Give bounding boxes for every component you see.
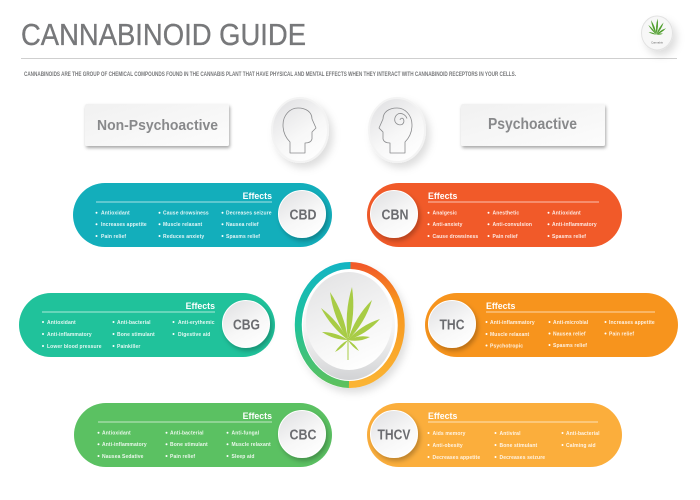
panel: non-psychoactive banner <box>85 104 229 146</box>
icon: cannabis leaf <box>321 287 380 360</box>
panel: CBC: Anti-inflammatory <box>102 442 147 448</box>
panel: CBD: Decreases seizure <box>226 210 272 216</box>
panel: CBG: Effects <box>186 301 215 311</box>
panel: CBG: Anti-erythemic <box>178 320 215 326</box>
panel: THCV: Antiviral <box>500 431 521 437</box>
panel: CBD: Increases appetite <box>101 222 147 228</box>
title: CANNABINOID GUIDE <box>21 17 306 52</box>
panel: CBN <box>367 183 622 247</box>
panel: THCV: Aids memory <box>432 431 466 437</box>
panel: CBG: Digestive aid <box>178 332 210 338</box>
panel: THC: Psychotropic <box>490 343 523 349</box>
panel: THC: Nausea relief <box>553 331 586 337</box>
intro text: CANNABINOIDS ARE THE GROUP OF CHEMICAL COMPOUNDS FOUND IN THE CANNABIS PLANT THAT HAVE PHYSICAL AND MENTAL EFFECTS WHEN THEY INTERACT WITH CANNABINOID RECEPTORS IN YOUR CELLS. <box>24 72 516 78</box>
panel: THCV: Calming aid <box>566 443 596 449</box>
icon: plain head <box>272 98 328 162</box>
panel: CBG: Anti-bacterial <box>117 320 151 326</box>
panel: CBC: Antioxidant <box>102 430 131 436</box>
panel: THC: Pain relief <box>609 331 634 337</box>
panel: psychoactive banner: Psychoactive <box>488 116 577 133</box>
icon: cannabis logo badge: Cannabis <box>651 40 664 44</box>
icon: cannabis logo badge <box>642 16 672 50</box>
panel: THCV: Anti-obesity <box>432 443 463 449</box>
icon: head with spiral <box>369 98 425 162</box>
panel: THC: Effects <box>486 301 515 311</box>
panel: THC: Spasms relief <box>553 343 587 349</box>
panel: CBC: CBC <box>290 428 317 444</box>
panel: CBD: Pain relief <box>101 234 126 240</box>
panel: CBC: Nausea Sedative <box>102 454 144 460</box>
panel: THCV: Effects <box>428 411 457 421</box>
panel: CBG <box>19 293 275 357</box>
panel: THC: Anti-inflammatory <box>490 320 535 326</box>
panel: CBD: Muscle relaxant <box>163 222 203 228</box>
central ring with cannabis leaf <box>294 262 404 388</box>
panel: THC: Increases appetite <box>609 320 655 326</box>
panel: CBD: Cause drowsiness <box>163 210 209 216</box>
panel: CBN: Effects <box>428 191 457 201</box>
panel: CBC <box>74 403 332 467</box>
panel: CBN: Pain relief <box>492 234 518 240</box>
panel: CBN: Analgesic <box>432 210 457 216</box>
panel: CBN: CBN <box>382 208 408 224</box>
panel: CBN: Anti-convulsion <box>492 222 532 228</box>
panel: THCV: Decreases appetite <box>432 455 480 461</box>
panel: non-psychoactive banner: Non-Psychoactive <box>97 117 218 134</box>
panel: CBD: Effects <box>243 191 272 201</box>
panel: CBC: Effects <box>243 411 272 421</box>
panel: CBD: CBD <box>290 208 316 224</box>
panel: THCV: THCV <box>378 428 411 444</box>
panel: CBC: Sleep aid <box>232 454 255 460</box>
panel: CBG: Bone stimulant <box>117 332 155 338</box>
panel: CBG: CBG <box>233 318 260 334</box>
panel: THC: Muscle relaxant <box>490 332 530 338</box>
panel: THCV: Bone stimulant <box>500 443 538 449</box>
panel: CBG: Antioxidant <box>47 320 76 326</box>
panel: THCV <box>367 403 622 467</box>
panel: CBN: Anti-anxiety <box>432 222 463 228</box>
panel: CBD: Nausea relief <box>226 222 259 228</box>
panel: CBN: Cause drowsiness <box>432 234 478 240</box>
panel: CBC: Bone stimulant <box>170 442 208 448</box>
panel: CBC: Pain relief <box>170 454 195 460</box>
panel: CBD: Reduces anxiety <box>163 234 204 240</box>
panel: CBG: Lower blood pressure <box>47 344 102 350</box>
panel: THC <box>425 293 678 357</box>
panel: CBC: Muscle relaxant <box>232 442 271 448</box>
panel: THCV: Decreases seizure <box>500 455 545 461</box>
panel: THCV: Anti-bacterial <box>566 431 600 437</box>
panel: CBC: Anti-fungal <box>232 430 260 436</box>
panel: CBN: Anesthetic <box>492 210 519 216</box>
panel: THC: THC <box>440 318 465 334</box>
panel: CBN: Anti-inflammatory <box>552 222 597 228</box>
panel: CBN: Spasms relief <box>552 234 586 240</box>
panel: CBG: Painkiller <box>117 344 140 350</box>
header divider <box>21 58 677 60</box>
panel: psychoactive banner <box>461 104 605 146</box>
panel: CBC: Anti-bacterial <box>170 430 204 436</box>
panel: CBN: Antioxidant <box>552 210 581 216</box>
panel: CBD: Spasms relief <box>226 234 260 240</box>
panel: CBG: Anti-inflammatory <box>47 332 92 338</box>
panel: THC: Anti-microbial <box>553 320 589 326</box>
panel: CBD: Antioxidant <box>101 210 130 216</box>
panel: CBD <box>73 183 332 247</box>
